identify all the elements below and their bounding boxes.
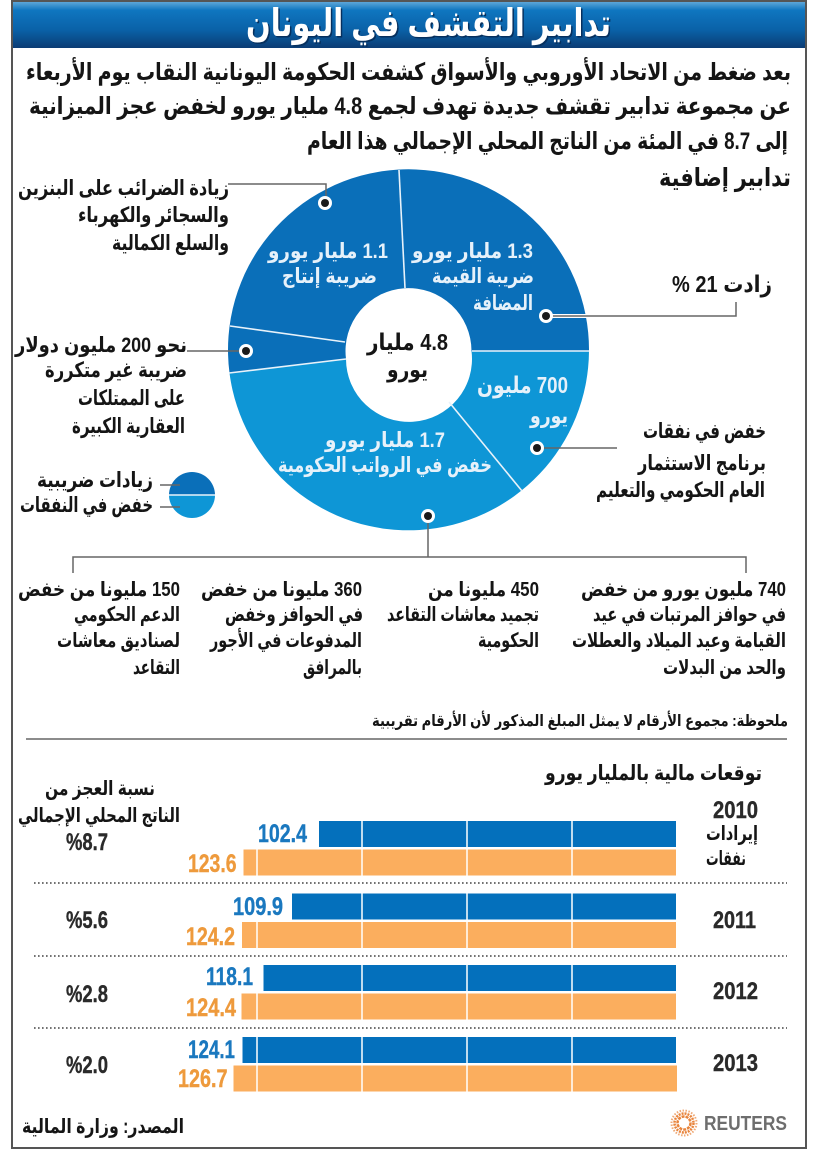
segment label: 1.3 billion VAT [411,240,534,315]
row 2011: 2011 [713,907,756,934]
donut chart [228,169,589,530]
row 2013: %2.0 [66,1052,108,1079]
title banner: تدابير التقشف في اليونان [248,4,612,46]
row 2011: 109.9 [233,893,283,921]
callout leader lines and dots [73,184,746,573]
callout: fuel and luxury tax [18,177,229,255]
segment label: 1.3 billion VAT: 1.3 مليار يورو [411,240,533,263]
source: المصدر: وزارة المالية [22,1116,184,1138]
row 2010: 123.6 [188,850,236,878]
breakdown column: 450 million: الحكومية [478,630,539,652]
title banner [13,2,805,48]
center total [366,329,448,383]
callout: public investment cut [596,420,766,502]
row 2010: 2010 [713,797,758,824]
legend [20,469,215,518]
legend: زيادات ضريبية [37,469,153,492]
row 2013: 126.7 [178,1065,228,1093]
segment label: 1.1 billion excise: ضريبة إنتاج [282,265,377,289]
Reuters logo [672,1110,787,1136]
segment label: 700 million: يورو [529,405,568,428]
segment label: 1.1 billion excise [267,240,388,289]
legend swatch: cuts [169,495,215,518]
row 2013 [66,1036,758,1093]
row 2012: 118.1 [206,963,253,991]
callout: property levy [14,334,187,438]
breakdown column: 360 million: 360 مليونا من خفض [201,579,362,601]
breakdown column: 360 million [201,579,363,679]
row 2011: %5.6 [66,907,108,934]
segment label: 1.7 billion wages: 1.7 مليار يورو [324,429,445,452]
callout: public investment cut: برنامج الاستثمار [637,452,766,475]
segment label: 1.3 billion VAT: المضافة [473,292,533,315]
callout: property levy: ضريبة غير متكررة [45,359,187,382]
intro text: إلى 8.7 في المئة من الناتج المحلي الإجمالي هذا العام [307,128,788,155]
callout: property levy: نحو 200 مليون دولار [14,334,187,357]
icon: Reuters dotted sphere [672,1110,696,1136]
row 2010 [66,797,758,878]
heading: additional measures: تدابير إضافية [659,164,791,193]
row 2013: 2013 [713,1050,758,1077]
bar chart: forecast by year [34,797,787,1093]
row 2010: إيرادات [706,823,758,845]
row 2012: %2.8 [66,981,108,1008]
deficit column heading: الناتج المحلي الإجمالي [18,805,180,828]
breakdown column: 450 million [387,579,539,652]
Reuters logo: REUTERS [704,1113,787,1135]
segment label: 1.1 billion excise: 1.1 مليار يورو [267,240,388,263]
callout: fuel and luxury tax: والسلع الكمالية [112,232,229,255]
row 2011: 124.2 [186,923,235,951]
deficit column heading: نسبة العجز من [45,778,155,800]
breakdown column: 150 million: التقاعد [133,657,180,679]
breakdown column: 150 million: لصناديق معاشات [57,630,180,652]
row 2010: 102.4 [258,820,307,848]
breakdown column: 150 million: الدعم الحكومي [74,604,180,627]
breakdown column: 360 million: بالمرافق [303,657,362,679]
segment label: 1.7 billion wages: خفض في الرواتب الحكومية [278,454,492,477]
breakdown column: 740 million: والحد من البدلات [663,657,786,679]
segment: spending cuts [230,351,589,530]
callout: fuel and luxury tax: والسجائر والكهرباء [78,204,229,227]
segment label: 700 million [477,372,568,428]
breakdown column: 740 million [572,579,786,679]
row 2013: 124.1 [188,1036,235,1064]
breakdown column: 360 million: في الحوافز وخفض [225,604,363,627]
row 2010: %8.7 [66,829,108,856]
row 2012 [66,963,758,1022]
breakdown column: 740 million: 740 مليون يورو من خفض [581,579,786,601]
breakdown column: 360 million: المدفوعات في الأجور [209,627,362,653]
callout: property levy: على الممتلكات [78,387,185,410]
breakdown column: 150 million: 150 مليونا من خفض [18,579,180,601]
breakdown column: 450 million: 450 مليونا من [428,579,539,601]
callout: VAT raised: زادت 21 % [672,271,772,298]
center total: 4.8 مليار [366,329,448,356]
callout: public investment cut: العام الحكومي والتعليم [596,479,765,502]
center total: يورو [386,357,428,383]
deficit column heading [18,778,180,828]
callout: fuel and luxury tax: زيادة الضرائب على البنزين [18,177,229,200]
segment: tax increases [228,169,589,373]
callout: public investment cut: خفض في نفقات [643,420,766,443]
title banner: تدابير التقشف في اليونان [246,3,611,45]
legend swatch: tax [169,472,215,495]
breakdown column: 150 million [18,579,180,679]
segment label: 700 million: 700 مليون [477,372,568,399]
row 2012: 124.4 [186,994,236,1022]
callout: property levy: العقارية الكبيرة [72,415,185,438]
legend: خفض في النفقات [20,494,153,517]
row 2012: 2012 [713,978,758,1005]
intro text [26,57,791,155]
row 2010: نفقات [706,848,746,870]
row 2011 [66,893,756,951]
bar chart heading: توقعات مالية بالمليار يورو [544,762,762,785]
breakdown column: 450 million: تجميد معاشات التقاعد [387,604,539,626]
segment label: 1.3 billion VAT: ضريبة القيمة [432,265,534,288]
segment label: 1.7 billion wages [278,429,492,477]
